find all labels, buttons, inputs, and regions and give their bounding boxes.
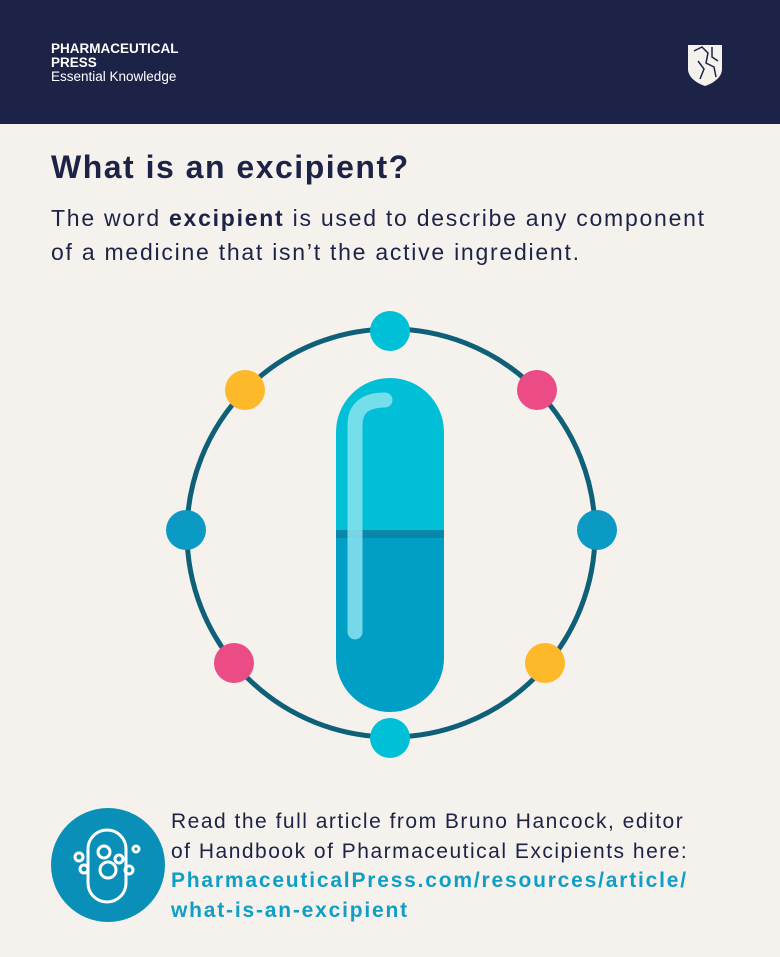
logo text bbox=[51, 41, 178, 84]
header bar bbox=[0, 0, 780, 124]
intro text: The word excipient is used to describe any component bbox=[51, 205, 706, 231]
logo text: PRESS bbox=[51, 55, 97, 70]
icon: capsule with particles bbox=[51, 808, 165, 922]
diagram: pill in orbit bbox=[166, 311, 617, 758]
pill capsule bbox=[336, 378, 444, 712]
call to action text: Read the full article from Bruno Hancock, editor bbox=[171, 810, 684, 833]
icon: shield logo bbox=[688, 45, 722, 86]
call to action text: PharmaceuticalPress.com/resources/article/ bbox=[171, 869, 688, 892]
title: What is an excipient? bbox=[51, 149, 410, 185]
logo text: PHARMACEUTICAL bbox=[51, 41, 178, 56]
logo text: Essential Knowledge bbox=[51, 69, 176, 84]
orbit dots bbox=[166, 311, 617, 758]
intro text: of a medicine that isn’t the active ingredient. bbox=[51, 239, 581, 265]
call to action text: of Handbook of Pharmaceutical Excipients here: bbox=[171, 840, 688, 862]
call to action text bbox=[171, 810, 688, 922]
call to action text: what-is-an-excipient bbox=[171, 898, 409, 922]
intro text bbox=[51, 205, 706, 265]
